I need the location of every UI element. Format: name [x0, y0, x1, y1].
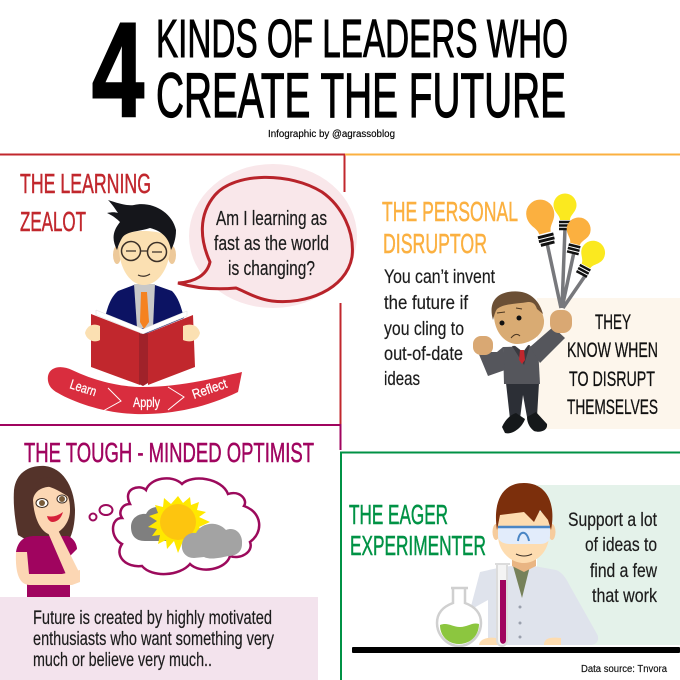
text: invent the future: you cling to	[384, 318, 464, 340]
icon: light bulbs	[523, 194, 609, 308]
panel: the personal disruptor	[345, 154, 680, 433]
ribbon: learn apply reflect	[48, 367, 242, 414]
heading: the learning zealot	[20, 168, 151, 237]
text: future is created	[33, 608, 274, 671]
panel: the learning zealot	[0, 154, 357, 425]
icon: light cloud	[182, 524, 242, 559]
big number 4: 4	[92, 0, 144, 145]
text box	[537, 485, 680, 645]
panel: the tough-minded optimist	[0, 425, 340, 680]
text: invent the future: the future if	[384, 292, 468, 314]
text: support a lot of ideas: that work	[592, 585, 657, 607]
byline: Infographic by @agrassoblog	[268, 129, 395, 140]
speech bubble	[178, 164, 357, 308]
heading: eager experimenter: EXPERIMENTER	[350, 530, 486, 561]
text: invent the future: out-of-date	[384, 343, 463, 365]
heading: the learning zealot: THE LEARNING	[20, 168, 151, 199]
icon: thinking woman	[14, 466, 80, 597]
text: they know when	[567, 310, 658, 419]
text: support a lot of ideas: find a few	[590, 560, 658, 582]
title	[92, 0, 568, 145]
ribbon: learn apply reflect: Learn	[68, 377, 98, 399]
speech bubble: is changing?	[228, 258, 315, 280]
text: invent the future	[384, 266, 495, 390]
text: they know when: THEY	[595, 310, 631, 334]
icon: test tube	[495, 564, 510, 646]
icon: flask	[437, 588, 481, 646]
heading: tough-minded optimist: THE TOUGH - MINDED OPTIMIST	[24, 437, 314, 468]
icon: dark cloud	[131, 507, 172, 541]
icon: scientist	[470, 483, 598, 645]
text box	[0, 597, 318, 680]
data source: Data source: Tnvora	[581, 664, 667, 675]
ribbon: learn apply reflect: Apply	[133, 395, 160, 410]
quote box	[537, 298, 680, 429]
text: support a lot of ideas: of ideas to	[585, 534, 657, 556]
text: support a lot of ideas: Support a lot	[568, 509, 657, 531]
table	[352, 647, 680, 653]
heading: the personal disruptor: DISRUPTOR	[383, 228, 487, 259]
heading: eager experimenter: THE EAGER	[349, 499, 448, 530]
speech bubble: fast as the world	[214, 233, 329, 255]
text: future is created: Future is created by highly motivated	[33, 608, 272, 629]
text: future is created: enthusiasts who want something very	[33, 629, 274, 650]
heading: the learning zealot: ZEALOT	[20, 206, 86, 237]
speech bubble: Am I learning as	[216, 208, 327, 230]
heading: the personal disruptor: THE PERSONAL	[382, 196, 518, 227]
thought cloud	[90, 478, 259, 574]
heading: the personal disruptor	[382, 196, 518, 259]
icon: businessman	[473, 291, 572, 433]
icon: sun	[148, 496, 210, 553]
text: support a lot of ideas	[568, 509, 658, 607]
text: future is created: much or believe very much..	[33, 650, 212, 671]
text: invent the future: You can’t invent	[384, 266, 495, 288]
icon: man reading book	[85, 200, 200, 386]
panel: the eager experimenter	[341, 452, 680, 680]
ribbon: learn apply reflect: Reflect	[190, 376, 229, 402]
heading: eager experimenter	[349, 499, 486, 561]
text: invent the future: ideas	[384, 368, 420, 390]
